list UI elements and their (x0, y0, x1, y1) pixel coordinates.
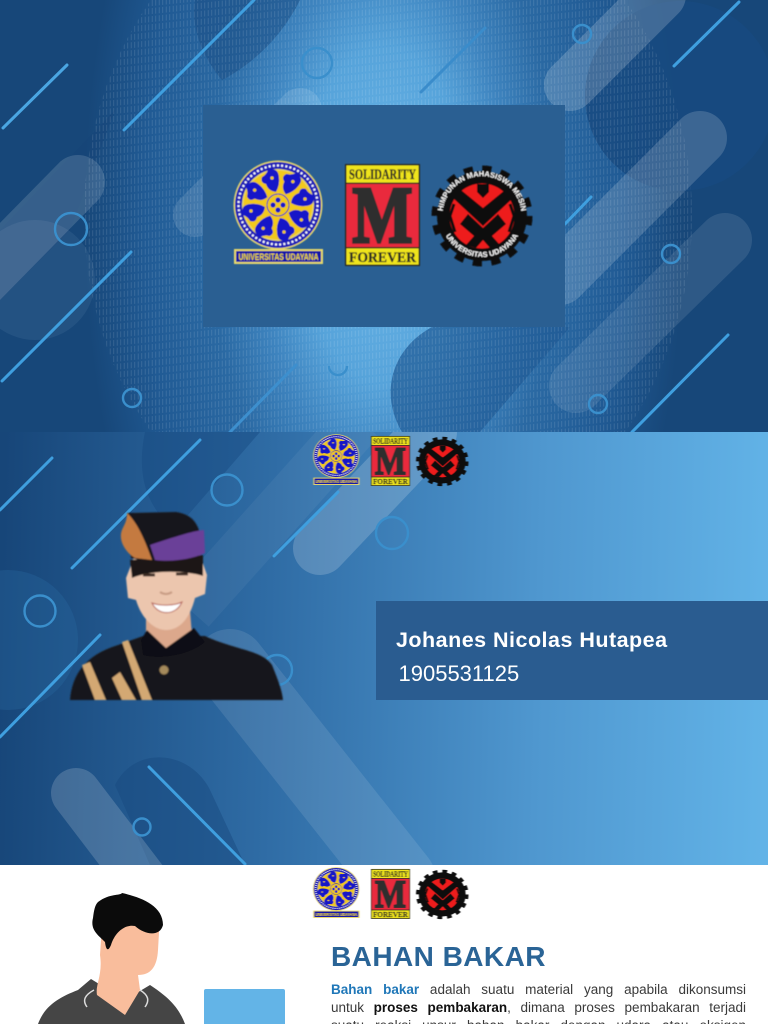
smile (152, 602, 182, 613)
heading: Bahan Bakar: BAHAN BAKAR (331, 941, 546, 972)
headdress purple fold (150, 530, 205, 561)
logo: Himpunan Mahasiswa Mesin gear (430, 164, 534, 268)
slide 1: cover background (0, 0, 768, 432)
small logo: Universitas Udayana: UNIVERSITAS UDAYANA (316, 912, 358, 917)
logo: Himpunan Mahasiswa Mesin gear: UNIVERSITAS UDAYANA (446, 232, 519, 258)
slide 3: white background (0, 865, 768, 1024)
small logo: Universitas Udayana: UNIVERSITAS UDAYANA (316, 479, 358, 484)
slide 2 logos (313, 434, 467, 486)
small logo: Solidarity M Forever: M (375, 872, 406, 916)
hair (92, 893, 163, 949)
decorative rings (55, 25, 680, 413)
small logo: Solidarity M Forever: SOLIDARITY (373, 870, 408, 878)
nose (160, 592, 172, 594)
logo: Solidarity M Forever: M (352, 172, 412, 260)
collar (141, 628, 205, 657)
small logo: Solidarity M Forever: M (375, 439, 406, 483)
illustration: man with laptop (38, 893, 285, 1024)
body paragraph (331, 982, 746, 1024)
jacket (70, 636, 283, 700)
small logo: Solidarity M Forever: FOREVER (373, 477, 408, 486)
button (160, 666, 168, 674)
headdress orange plume (121, 513, 152, 560)
shirt (38, 979, 185, 1024)
cover logos (232, 160, 534, 268)
logo: Solidarity M Forever: FOREVER (349, 250, 416, 266)
laptop screen (204, 989, 285, 1024)
small logo: Solidarity M Forever: SOLIDARITY (373, 437, 408, 445)
student name: Johanes Nicolas Hutapea (396, 628, 668, 652)
slide 3 logos (313, 867, 467, 919)
hair (130, 555, 203, 578)
diagonal accent lines (2, 0, 739, 432)
logo: Solidarity M Forever: SOLIDARITY (349, 167, 416, 183)
eyes (143, 574, 188, 575)
collar highlights (85, 990, 148, 1007)
profile name panel (376, 601, 768, 700)
logo: Universitas Udayana (234, 160, 323, 264)
body paragraph: untuk proses pembakaran, dimana proses pembakaran terjadi (331, 1000, 746, 1015)
portrait photo (70, 512, 283, 700)
neck and face (96, 926, 160, 1015)
small logo: gear (418, 438, 467, 484)
body paragraph: Bahan bakar adalah suatu material yang apabila dikonsumsi (331, 982, 746, 997)
neck (146, 610, 192, 650)
logo: Himpunan Mahasiswa Mesin gear: HIMPUNAN MAHASISWA MESIN (436, 170, 528, 212)
small logo: Solidarity M Forever: FOREVER (373, 910, 408, 919)
small logo: Universitas Udayana (313, 434, 360, 485)
face (126, 555, 207, 630)
cover logo panel (203, 105, 565, 327)
logo: Universitas Udayana: UNIVERSITAS UDAYANA (238, 252, 319, 262)
headdress (127, 512, 204, 561)
small logo: Universitas Udayana (313, 867, 360, 918)
sash (82, 640, 152, 700)
small logo: gear (418, 871, 467, 917)
student number: 1905531125 (398, 661, 519, 686)
slide 2: profile background (0, 420, 768, 890)
